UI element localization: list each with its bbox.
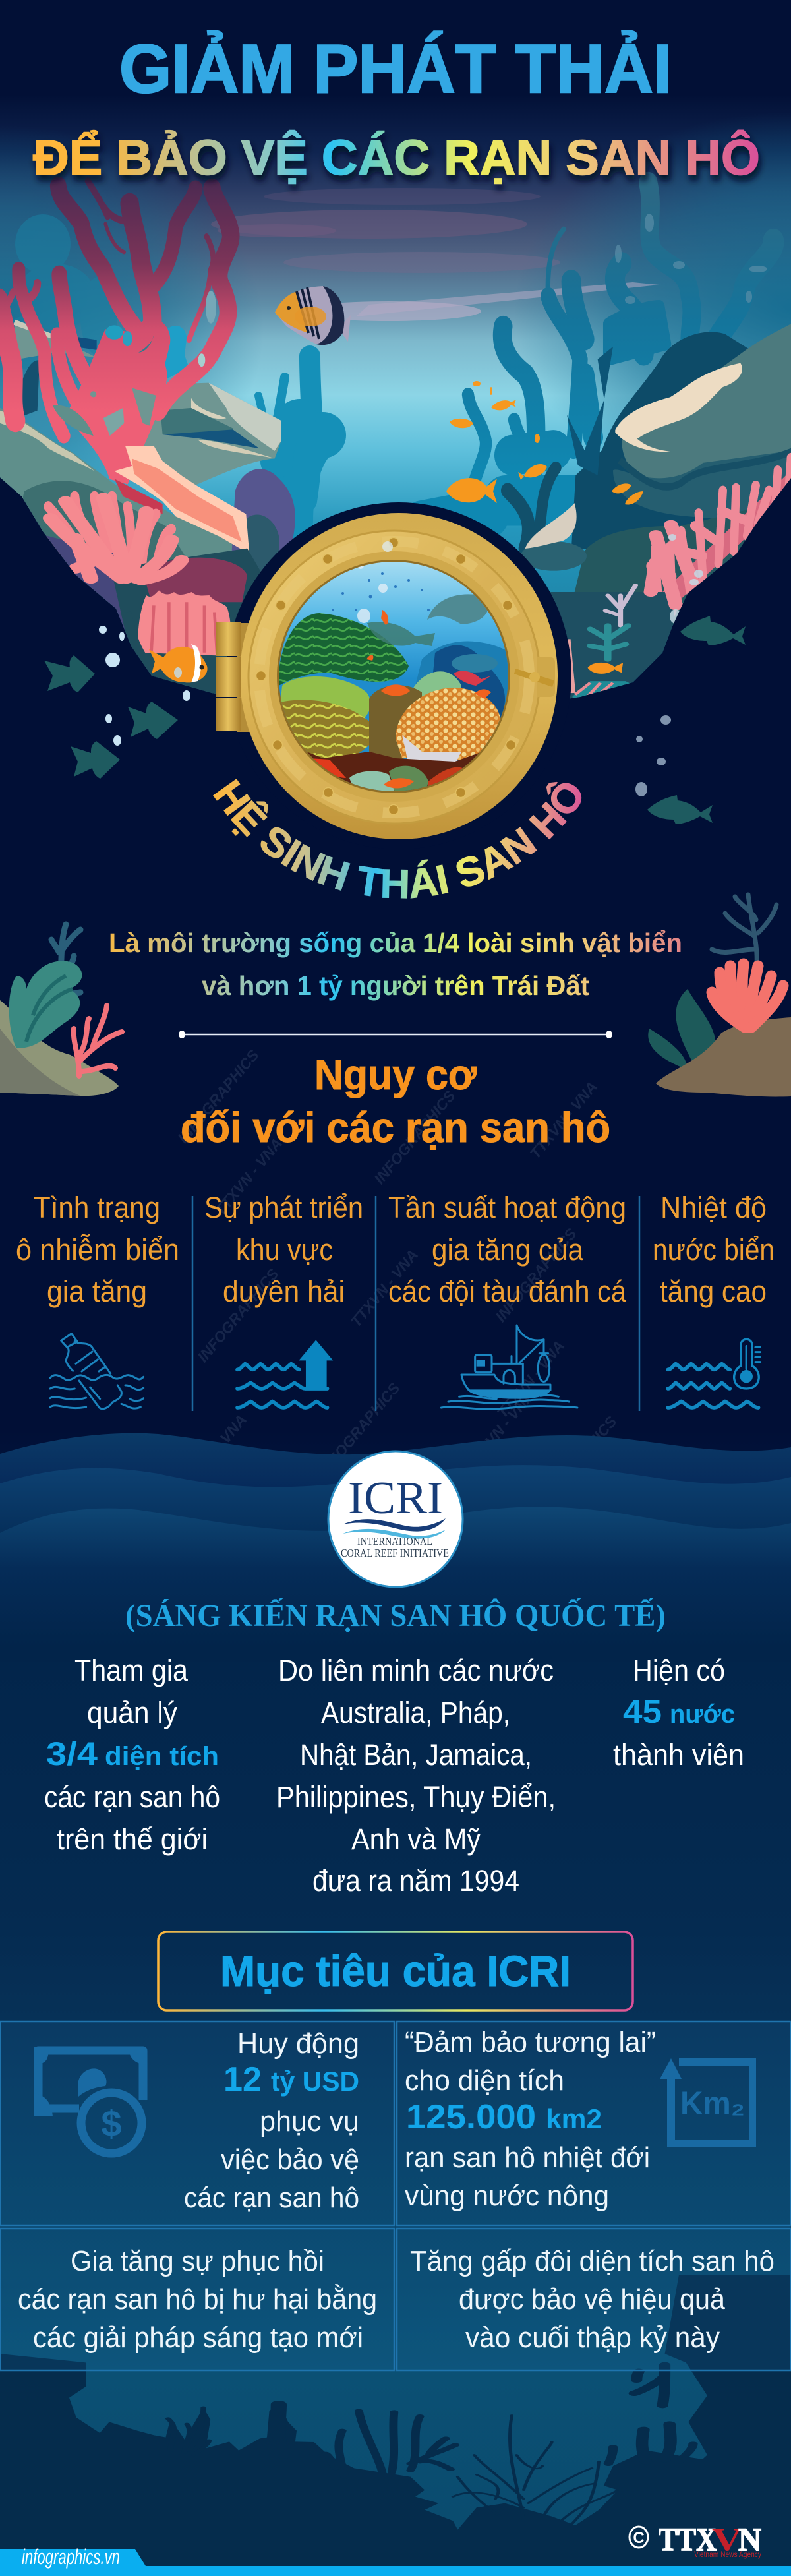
ICRI column 1: 3/4: [46, 1735, 98, 1772]
ICRI column 1: [44, 1654, 220, 1856]
pink coral right: [651, 458, 791, 612]
inner bevel shade: [277, 560, 510, 793]
goal 1 text: Huy động: [237, 2027, 359, 2060]
goal 1 text: việc bảo vệ: [221, 2143, 359, 2176]
right rocks: [508, 322, 791, 652]
goal 3 text: [18, 2245, 377, 2354]
glass bubble top of ring: [382, 541, 393, 552]
scene water gradient: [0, 113, 791, 699]
ICRI column 1: diện tích: [105, 1742, 219, 1771]
right side teal glow: [532, 127, 791, 439]
lower-right reef detail: [525, 525, 696, 700]
porthole dark halo: [226, 502, 571, 849]
threat 3 text: Tần suất hoạt động: [388, 1191, 626, 1224]
glass bubbles: [357, 562, 388, 623]
agency name: Vietnam News Agency: [694, 2550, 761, 2559]
purple coral: [231, 469, 295, 587]
goal 2 text: rạn san hô nhiệt đới: [405, 2142, 650, 2174]
icon: thermometer and water: [668, 1339, 760, 1408]
goal 1 text: phục vụ: [260, 2105, 359, 2138]
left side teal glow: [0, 142, 249, 487]
ICRI column 2: Do liên minh các nước: [278, 1654, 554, 1687]
striped butterfly fish: [275, 286, 351, 345]
porthole window: [216, 502, 571, 849]
pink fan coral lower left: [46, 496, 171, 582]
goal 1 text: tỷ USD: [271, 2066, 359, 2097]
logo waves: [343, 1518, 446, 1532]
arc heading: HỆ SINH THÁI SAN HÔ: [213, 779, 581, 899]
goal 4 text: Tăng gấp đôi diện tích san hô: [410, 2245, 775, 2277]
title line 1: GIẢM PHÁT THẢI: [119, 31, 672, 107]
intro text: và hơn 1 tỷ người trên Trái Đất: [202, 971, 589, 1001]
ICRI column 1: trên thế giới: [57, 1822, 208, 1856]
goal 2 text: [405, 2026, 656, 2212]
icon: km2 area: [660, 2058, 756, 2147]
watermark: INFOGRAPHICS: [174, 1046, 262, 1147]
goal 2 text: cho diện tích: [405, 2064, 564, 2097]
kelp centre-left of window: [258, 356, 323, 521]
watermark: INFOGRAPHICS: [370, 1087, 459, 1187]
deco: right rock with coral: [648, 895, 791, 1096]
threat 2 text: Sự phát triển: [204, 1191, 363, 1224]
logo disc: [328, 1451, 463, 1587]
threat 2 text: [204, 1191, 363, 1308]
V letter: V: [712, 2521, 742, 2558]
goal 4 text: được bảo vệ hiệu quả: [459, 2283, 725, 2316]
ICRI column 2: Philippines, Thụy Điển,: [276, 1780, 556, 1814]
hinge: [216, 622, 241, 731]
scene bubbles: [174, 534, 703, 678]
threat 3 text: các đội tàu đánh cá: [388, 1274, 627, 1308]
ICRI column 2: Australia, Pháp,: [321, 1696, 510, 1729]
ICRI column 1: Tham gia: [74, 1654, 189, 1687]
watermark: TTXVN - VNA: [494, 1337, 568, 1422]
intro text: Là môi trường sống của 1/4 loài sinh vật biển: [109, 928, 682, 958]
heading: threats: [181, 1051, 610, 1151]
icon: rising water with arrow: [237, 1340, 333, 1408]
threat 4 text: nước biển: [653, 1233, 775, 1267]
watermark: TTXVN - VNA: [347, 1246, 421, 1331]
ICRI logo: [328, 1451, 463, 1587]
logo name: INTERNATIONAL: [357, 1535, 432, 1547]
small orange fish: [446, 381, 643, 505]
TTX letters: TTX: [659, 2521, 717, 2558]
logo name line 2: CORAL REEF INITIATIVE: [341, 1547, 449, 1559]
goal 2 text: 125.000: [406, 2098, 536, 2136]
gold outer ring: [240, 513, 558, 839]
ICRI column 3: nước: [670, 1700, 735, 1729]
threat 3 text: [388, 1191, 627, 1308]
logo wave light: [343, 1529, 446, 1539]
threat 1 text: gia tăng: [47, 1274, 147, 1308]
wave band: [0, 1433, 791, 1662]
watermark: TTXVN - VNA: [527, 1078, 601, 1162]
icon: money and coin: [34, 2047, 146, 2153]
silhouette fish left: [44, 616, 746, 824]
gold plate: [249, 531, 540, 824]
ring bevel: [249, 531, 540, 824]
TTXVN logo: [630, 2521, 761, 2559]
divider: [179, 1031, 612, 1038]
clown fish: [149, 644, 208, 682]
bubbles right: [635, 715, 671, 796]
purple clouds: [211, 188, 659, 321]
ICRI column 3: thành viên: [613, 1738, 744, 1772]
icon: plastic bottle in water: [50, 1334, 144, 1409]
goals heading box: [158, 1932, 633, 2010]
goal 2 text: vùng nước nông: [405, 2180, 609, 2212]
goal 2 text: “Đảm bảo tương lai”: [405, 2026, 656, 2058]
kelp right side: [422, 183, 773, 526]
icon: money and coin: $: [101, 2103, 122, 2144]
logo letters: ICRI: [348, 1473, 443, 1524]
title line 2: ĐỂ BẢO VỆ CÁC RẠN SAN HÔ: [33, 130, 760, 185]
hinge plates: [237, 623, 257, 732]
ICRI column 3: Hiện có: [633, 1654, 725, 1687]
icon: fishing boat: [441, 1325, 577, 1409]
watermark: INFOGRAPHICS: [194, 1265, 282, 1365]
watermark: INFOGRAPHICS: [315, 1379, 403, 1480]
threat 4 text: [653, 1191, 775, 1308]
icon: km2 area: Km₂: [680, 2085, 745, 2122]
goal 4 text: [410, 2245, 775, 2354]
watermark: INFOGRAPHICS: [492, 1224, 580, 1325]
ICRI expansion heading: (SÁNG KIẾN RẠN SAN HÔ QUỐC TẾ): [125, 1597, 666, 1633]
watermark: [174, 1046, 620, 1513]
ICRI column 1: các rạn san hô: [44, 1780, 220, 1814]
N letter: N: [738, 2521, 761, 2558]
goals heading box: Mục tiêu của ICRI: [220, 1946, 571, 1995]
watermark: INFOGRAPHICS: [532, 1412, 620, 1513]
goal 1 text: các rạn san hô: [184, 2182, 359, 2214]
blue patches behind coral: [165, 326, 188, 378]
ICRI column 3: [613, 1654, 744, 1772]
footer bar: infographics.vn: [22, 2545, 120, 2569]
deco: left rock with seaweed: [0, 924, 122, 1096]
window glass scene: [277, 560, 511, 794]
goal 3 text: các giải pháp sáng tạo mới: [33, 2321, 363, 2354]
footer bar: [0, 2545, 791, 2576]
ICRI column 2: đưa ra năm 1994: [312, 1864, 519, 1898]
raised ring detail: [259, 541, 529, 813]
goal 2 text: km2: [546, 2103, 602, 2134]
threat 1 text: ô nhiễm biển: [16, 1233, 179, 1267]
inner bevel: [269, 551, 519, 802]
dark fish and bubbles outside scene: [44, 616, 746, 824]
threat 3 text: gia tăng của: [432, 1233, 584, 1267]
bottom coral silhouette: [0, 2275, 791, 2576]
bolts: [256, 538, 515, 815]
threat 2 text: khu vực: [236, 1233, 333, 1267]
goals table: [0, 2022, 791, 2370]
goal 1 text: 12: [223, 2060, 262, 2099]
goal 3 text: các rạn san hô bị hư hại bằng: [18, 2283, 377, 2316]
kelp holes: [615, 214, 767, 304]
ICRI column 1: quản lý: [87, 1696, 177, 1729]
threat 1 text: [16, 1191, 179, 1308]
lower-left reef detail: [30, 498, 283, 703]
ICRI column 3: 45: [623, 1693, 662, 1730]
latch: [514, 657, 555, 697]
goal 1 text: [184, 2027, 359, 2214]
threat 2 text: duyên hải: [223, 1274, 345, 1308]
intro text: [109, 928, 682, 1001]
goal 3 text: Gia tăng sự phục hồi: [71, 2245, 324, 2277]
ICRI column 2: [276, 1654, 556, 1898]
threat 4 text: Nhiệt độ: [660, 1191, 767, 1224]
threat 1 text: Tình trạng: [34, 1191, 160, 1224]
watermark: TTXVN - VNA: [212, 1135, 285, 1219]
heading: threats: Nguy cơ: [314, 1051, 477, 1098]
ICRI column 2: Nhật Bản, Jamaica,: [300, 1738, 532, 1772]
threat column dividers: [192, 1196, 639, 1411]
coral holes: [53, 291, 216, 436]
far background kelp left: [15, 214, 117, 369]
red branching coral: [0, 181, 231, 484]
peach encrusting coral: [114, 446, 249, 554]
heading: threats: đối với các rạn san hô: [181, 1104, 610, 1151]
threat 4 text: tăng cao: [660, 1274, 767, 1308]
copyright mark: [630, 2527, 648, 2548]
left rock upper: [0, 320, 281, 613]
goal 4 text: vào cuối thập kỷ này: [465, 2321, 720, 2354]
watermark: TTXVN - VNA: [463, 1387, 537, 1472]
underwater scene illustration: [0, 113, 791, 699]
copyright letter: C: [633, 2529, 645, 2547]
ICRI column 2: Anh và Mỹ: [351, 1822, 481, 1856]
watermark: TTXVN - VNA: [176, 1411, 250, 1495]
bubbles left: [99, 626, 190, 746]
